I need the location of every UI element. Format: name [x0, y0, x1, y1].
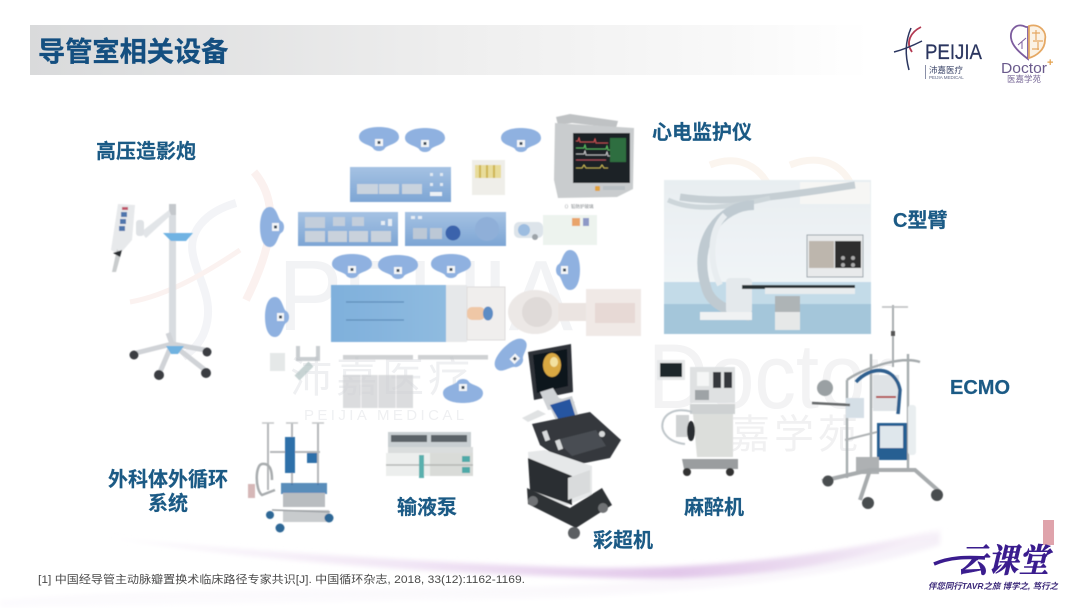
- Yunketang tagline: 伴您同行TAVR之旅 博学之, 笃行之: [928, 581, 1058, 591]
- title bar: [30, 25, 870, 75]
- label: extracorporeal circulation: [108, 468, 228, 515]
- label: extracorporeal circulation: 外科体外循环: [108, 468, 228, 491]
- contrast console: [514, 215, 597, 245]
- watermark: Doctor+ logo and text: [648, 160, 893, 457]
- watermark: Doctor+ logo and text: Doctor: [648, 326, 893, 428]
- Peijia logo: [894, 27, 982, 80]
- device: ultrasound system: [522, 344, 621, 539]
- Doctor+ logo: Doctor: [1001, 60, 1047, 77]
- label: extracorporeal circulation: 系统: [148, 491, 188, 515]
- Peijia logo: PEIJIA: [925, 41, 982, 64]
- Yunketang logo: 云课堂: [957, 535, 1054, 582]
- device: heart-lung bypass system: [248, 423, 334, 532]
- label: ultrasound: 彩超机: [593, 529, 653, 552]
- device: infusion pump: [386, 432, 473, 478]
- panel: left control cabinet: [298, 212, 398, 246]
- watermark: Peijia logo and text: 沛嘉医疗: [290, 354, 474, 401]
- title: 导管室相关设备: [38, 36, 228, 67]
- layout diagram: catheter lab floor plan: [260, 127, 641, 408]
- label: C-arm: C型臂: [893, 209, 947, 232]
- Peijia logo: PEIJIA MEDICAL: [929, 75, 964, 80]
- device: ECG monitor: [554, 114, 634, 210]
- bottom swoosh: [0, 528, 945, 608]
- label: infusion pump: 输液泵: [397, 496, 457, 519]
- Peijia logo: 沛嘉医疗: [929, 65, 964, 75]
- label: ECG monitor: 心电监护仪: [652, 121, 752, 144]
- patient table: [331, 285, 505, 342]
- Yunketang logo: [928, 520, 1058, 591]
- equipment box with yellow tubes: [472, 160, 505, 195]
- Doctor+ logo: [1001, 25, 1053, 84]
- C-arm top view: [508, 289, 641, 336]
- device: power injector: [111, 204, 212, 380]
- panel: ceiling rack: [350, 167, 451, 202]
- device: ECMO cart: [812, 305, 943, 509]
- device: ECG monitor: （）铅防护玻璃: [562, 203, 594, 210]
- watermark: Doctor+ logo and text: 嘉学苑: [730, 413, 862, 457]
- panel: right control cabinet: [405, 212, 506, 246]
- watermark: Peijia logo and text: [130, 172, 573, 424]
- watermark: Peijia logo and text: PEIJIA: [278, 240, 573, 352]
- device: anaesthesia machine: [657, 360, 738, 476]
- label: anaesthesia machine: 麻醉机: [684, 496, 744, 519]
- watermark: Peijia logo and text: PEIJIA MEDICAL: [304, 407, 467, 424]
- Doctor+ logo: +: [1047, 57, 1053, 69]
- Doctor+ logo: 医嘉学苑: [1007, 74, 1042, 84]
- label: power injector: 高压造影炮: [96, 139, 196, 163]
- staff position markers: [260, 127, 580, 403]
- device: C-arm room photo: [664, 180, 871, 334]
- label: ECMO: ECMO: [950, 377, 1010, 399]
- grey cabinet group: [270, 346, 488, 408]
- reference footnote: [1] 中国经导管主动脉瓣置换术临床路径专家共识[J]. 中国循环杂志, 2018, 33(12):1162-1169.: [38, 572, 525, 586]
